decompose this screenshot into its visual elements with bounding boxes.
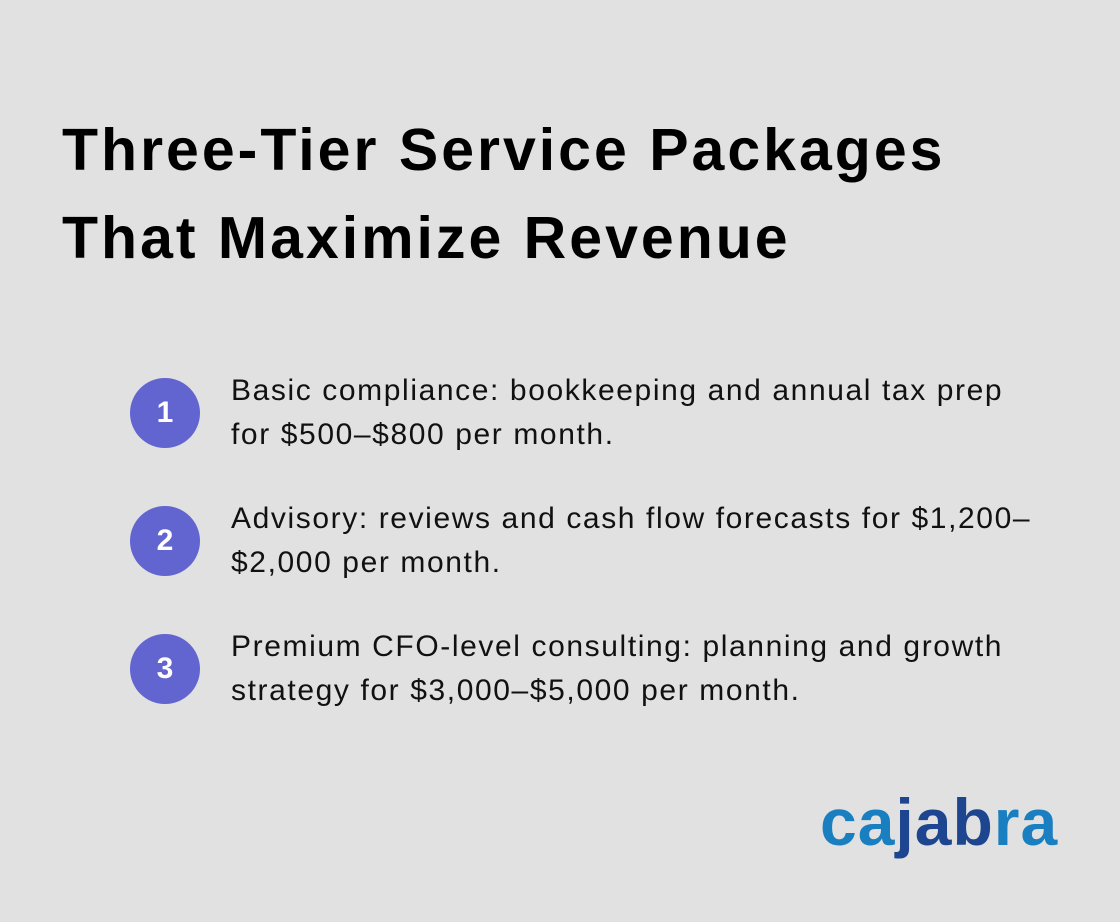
text 3: strategy for $3,000–$5,000 per month.	[231, 674, 801, 707]
title: That Maximize Revenue	[62, 205, 791, 271]
item 3	[130, 630, 1003, 707]
text 1	[231, 374, 1003, 451]
badge 1: 1	[157, 396, 173, 429]
item 2	[130, 502, 1031, 579]
text 1: for $500–$800 per month.	[231, 418, 615, 451]
text 3	[231, 630, 1003, 707]
badge 1	[130, 378, 200, 448]
badge 3: 3	[157, 652, 173, 685]
item 1	[130, 374, 1003, 451]
badge 3	[130, 634, 200, 704]
badge 2: 2	[157, 524, 173, 557]
text 1: Basic compliance: bookkeeping and annual tax prep	[231, 374, 1003, 407]
title	[62, 117, 945, 271]
text 2: Advisory: reviews and cash flow forecasts for $1,200–	[231, 502, 1031, 535]
title: Three-Tier Service Packages	[62, 117, 945, 183]
text 3: Premium CFO-level consulting: planning and growth	[231, 630, 1003, 663]
logo: cajabra	[820, 785, 1058, 859]
text 2	[231, 502, 1031, 579]
badge 2	[130, 506, 200, 576]
text 2: $2,000 per month.	[231, 546, 502, 579]
